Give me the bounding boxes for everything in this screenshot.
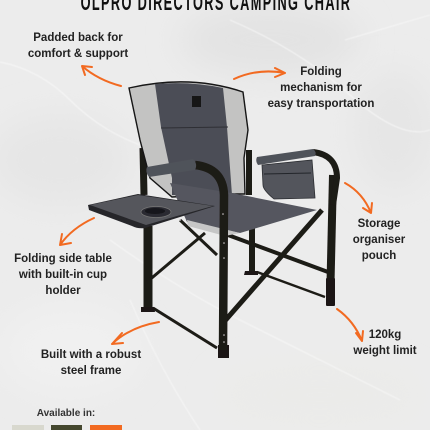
arrow: folding mechanism: [234, 68, 285, 79]
label: side table: holder: [45, 285, 81, 297]
arrow: storage pouch: [345, 183, 372, 213]
right arm pad: [256, 149, 316, 165]
brand tag: [192, 96, 201, 107]
label: padded back: comfort & support: [28, 48, 128, 60]
label: available colours: Available in:: [37, 408, 95, 419]
label: padded back: Padded back for: [33, 32, 123, 44]
arrow: padded back: [82, 66, 121, 86]
left arm pad: [146, 159, 196, 177]
frame rivets: [179, 213, 225, 343]
label: steel frame: Built with a robust: [41, 349, 141, 361]
side table: [88, 194, 215, 228]
label: weight limit: 120kg: [369, 329, 401, 341]
label: storage pouch: Storage: [358, 218, 400, 230]
label: steel frame: steel frame: [61, 365, 121, 377]
label: side table: with built-in cup: [18, 269, 107, 281]
label: storage pouch: organiser: [353, 234, 406, 246]
arrow: side table: [60, 218, 94, 245]
chair illustration: [88, 82, 337, 358]
arrow: weight limit: [337, 309, 363, 341]
right rear arm: [313, 152, 337, 205]
cup holder: [141, 206, 171, 218]
rear legs and frame: [143, 144, 333, 348]
arrow: steel frame: [112, 322, 159, 344]
feet: [141, 271, 335, 358]
label: weight limit: weight limit: [352, 345, 417, 357]
label: folding mechanism: Folding: [300, 66, 342, 78]
label: side table: Folding side table: [14, 253, 112, 265]
backrest: [129, 82, 248, 197]
seat: [170, 183, 317, 233]
storage pouch: [262, 160, 315, 199]
label: folding mechanism: mechanism for: [280, 82, 362, 94]
colour swatches: [12, 425, 122, 430]
front leg and arm: [195, 165, 224, 350]
label: storage pouch: pouch: [362, 250, 396, 262]
label: folding mechanism: easy transportation: [268, 98, 374, 110]
